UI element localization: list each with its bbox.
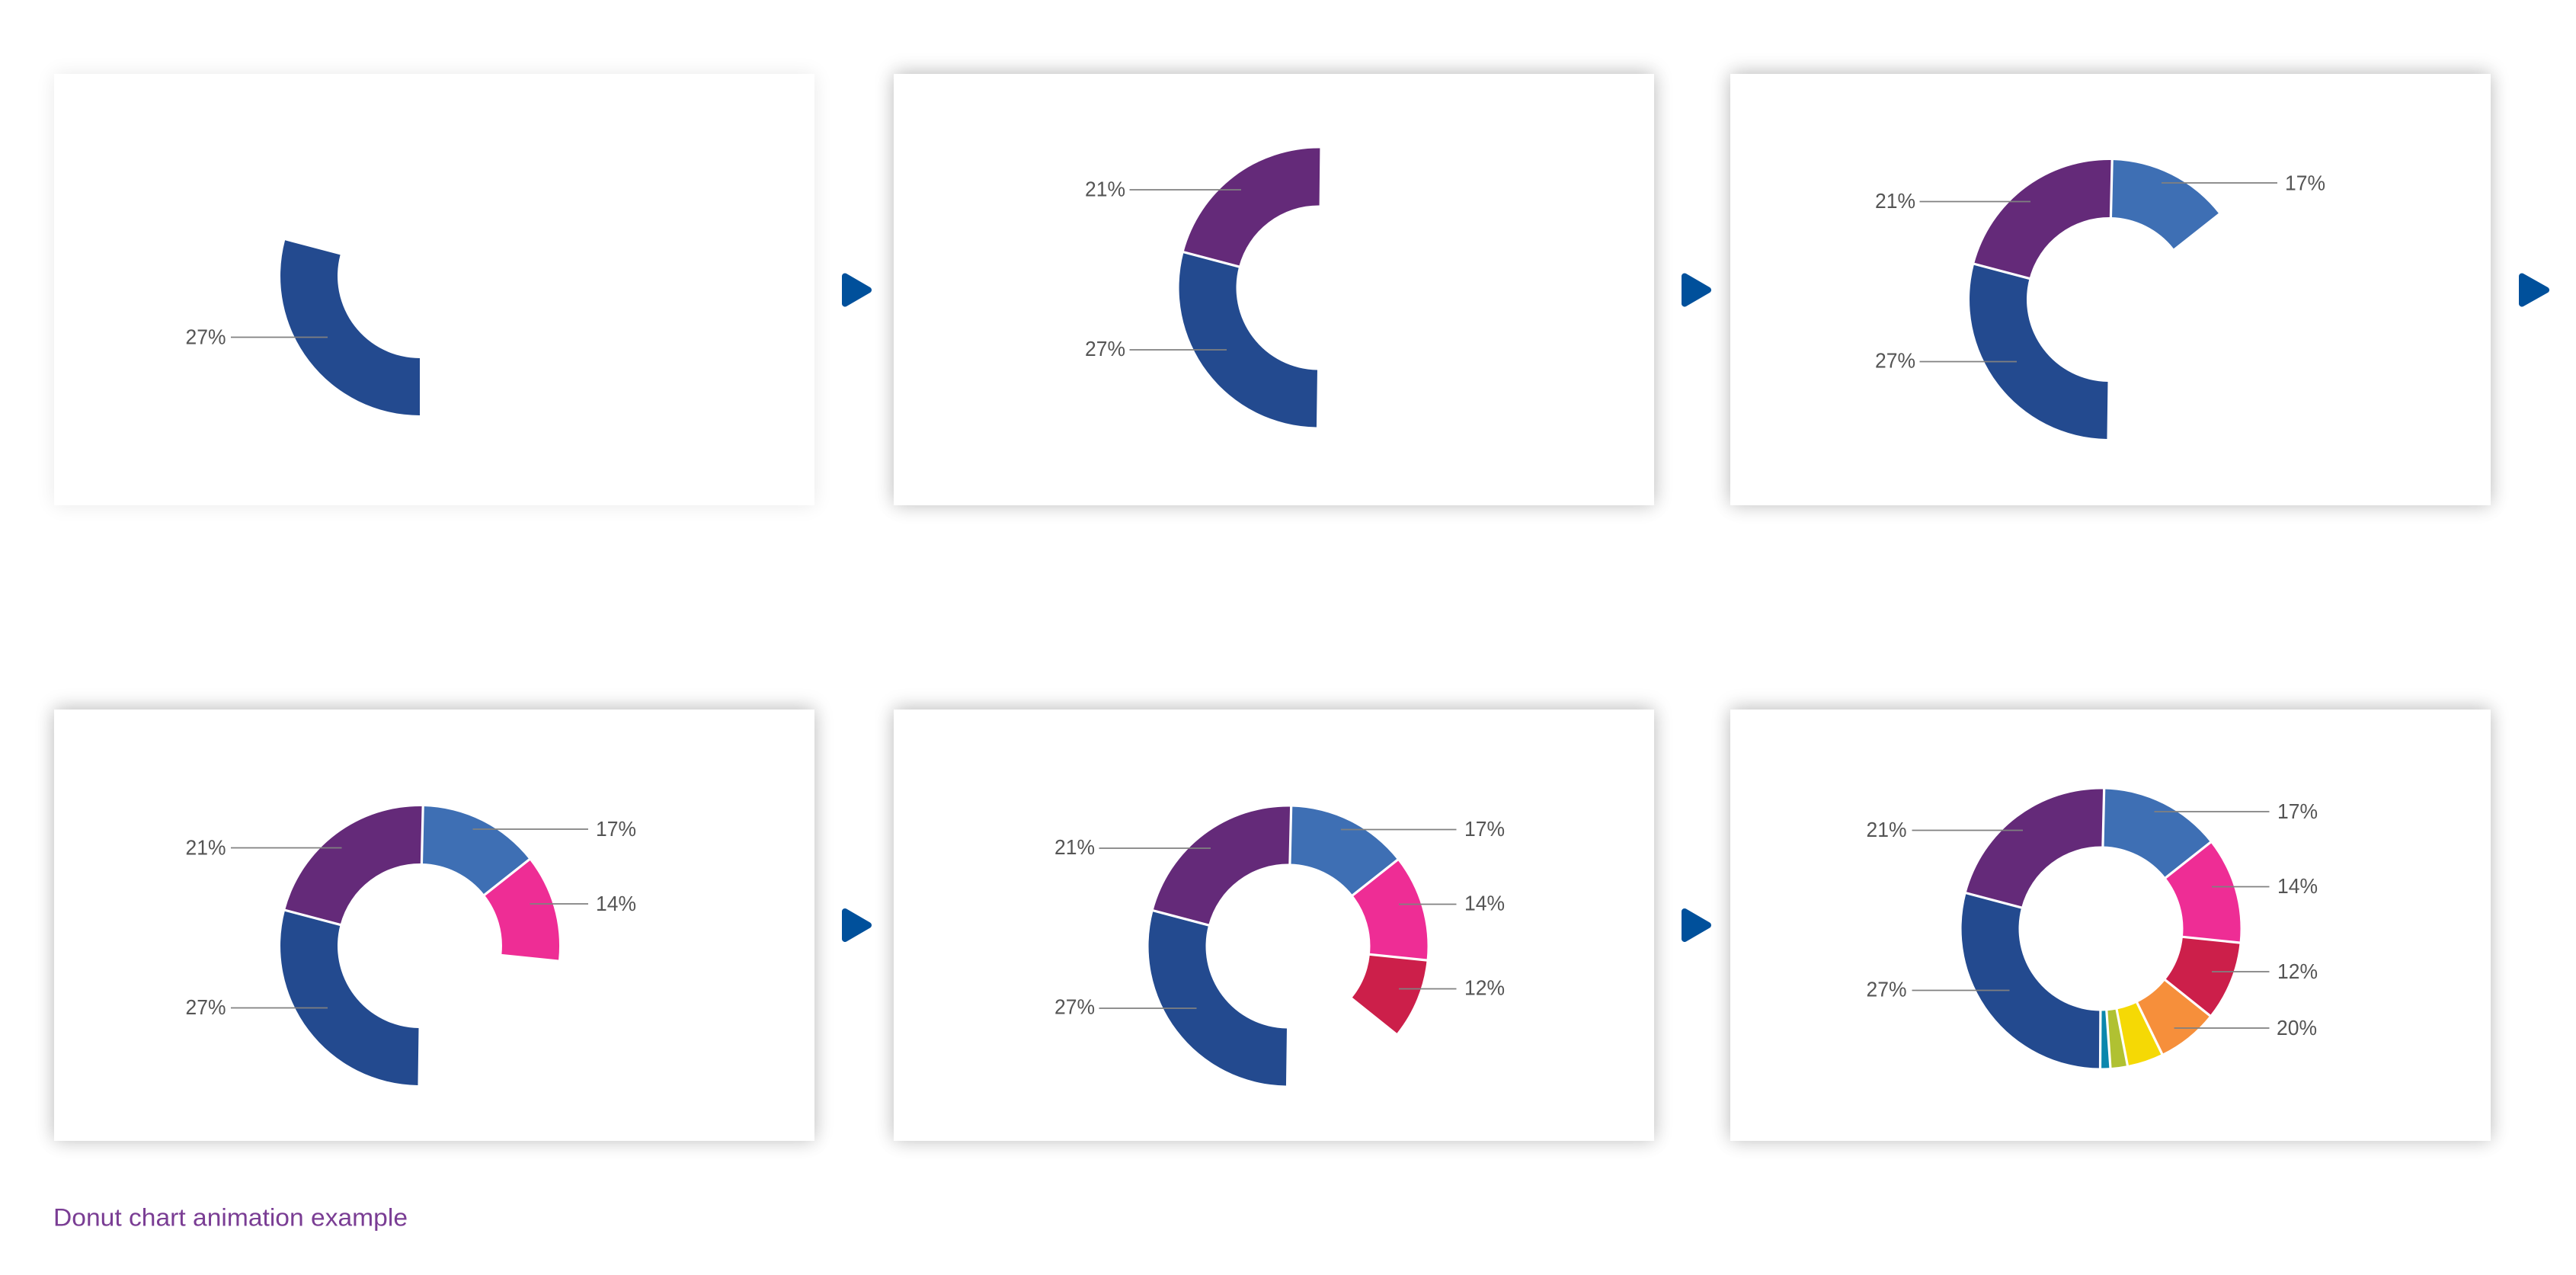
panel: step 3, three segments [1730, 74, 2491, 505]
label: 12%: 12% [1464, 975, 1505, 1000]
arrow: step 5 to 6 [1685, 911, 1708, 939]
segment: teal [2100, 1011, 2110, 1068]
segment: purple 21% [1974, 160, 2112, 278]
label: 14%: 14% [1464, 892, 1505, 915]
label: 12% [1399, 975, 1505, 1000]
panel: step 1, navy segment [54, 74, 814, 505]
label: 12% [2212, 959, 2318, 983]
label: 27%: 27% [1085, 337, 1125, 360]
segment: blue 17% [2110, 160, 2219, 248]
panel: step 4, four segments [54, 710, 814, 1141]
segment: green [2107, 1009, 2127, 1068]
label: 17%: 17% [596, 817, 636, 841]
segment: purple 21% [1966, 790, 2104, 908]
label: 27%: 27% [186, 995, 226, 1019]
label: 21%: 21% [1867, 818, 1906, 841]
label: 20%: 20% [2277, 1016, 2317, 1040]
panel: step 6, complete donut [1730, 710, 2491, 1141]
segment: yellow [2117, 1003, 2162, 1065]
arrow: step 2 to 3 [1685, 276, 1708, 303]
label: 27%: 27% [1875, 349, 1915, 372]
label: 14% [1399, 892, 1505, 915]
label: 27%: 27% [1867, 977, 1906, 1001]
label: 21%: 21% [1085, 177, 1125, 201]
label: 14% [530, 892, 636, 915]
caption: Donut chart animation example [53, 1204, 408, 1232]
label: 14%: 14% [2277, 874, 2318, 898]
label: 14% [2212, 874, 2318, 898]
donut: step 5 [1149, 806, 1428, 1085]
label: 14%: 14% [596, 892, 636, 915]
donut: step 1 [280, 240, 420, 415]
donut: step 3 [1970, 159, 2219, 439]
label: 17%: 17% [1464, 817, 1505, 841]
panel: step 2, navy and purple segments [894, 74, 1654, 505]
segment: pink 14% [1352, 860, 1428, 960]
segment: navy 27% [280, 910, 418, 1085]
donut: step 6 [1962, 788, 2241, 1068]
label: 12%: 12% [2277, 959, 2318, 983]
segment: navy 27% [1970, 264, 2107, 439]
segment: navy 27% [280, 240, 420, 415]
segment: orange [2137, 980, 2210, 1054]
label: 27%: 27% [1054, 995, 1095, 1018]
label: 17%: 17% [2277, 799, 2318, 823]
segment: navy 27% [1179, 252, 1317, 427]
arrow: step 3 onward [2522, 276, 2546, 303]
segment: blue 17% [421, 806, 530, 895]
segment: navy 27% [1962, 893, 2101, 1068]
arrow: step 4 to 5 [845, 911, 869, 939]
label: 27%: 27% [186, 325, 226, 349]
segment: purple 21% [285, 806, 423, 924]
segment: pink 14% [2165, 842, 2241, 943]
segment: purple 21% [1154, 807, 1291, 925]
donut: step 4 [280, 806, 559, 1085]
segment: red 12% [1352, 954, 1427, 1033]
segment: blue 17% [1290, 807, 1397, 895]
label: 17%: 17% [2285, 171, 2325, 195]
arrow: step 1 to 2 [845, 276, 869, 303]
label: 21%: 21% [1875, 189, 1915, 213]
donut: step 2 [1179, 148, 1320, 427]
panel: step 5, five segments [894, 710, 1654, 1141]
label: 21%: 21% [1054, 835, 1095, 859]
segment: navy 27% [1149, 911, 1287, 1085]
segment: blue 17% [2103, 790, 2210, 878]
segment: pink 14% [485, 860, 559, 960]
label: 21%: 21% [186, 835, 226, 860]
segment: purple 21% [1184, 148, 1320, 267]
segment: red 12% [2165, 937, 2240, 1016]
